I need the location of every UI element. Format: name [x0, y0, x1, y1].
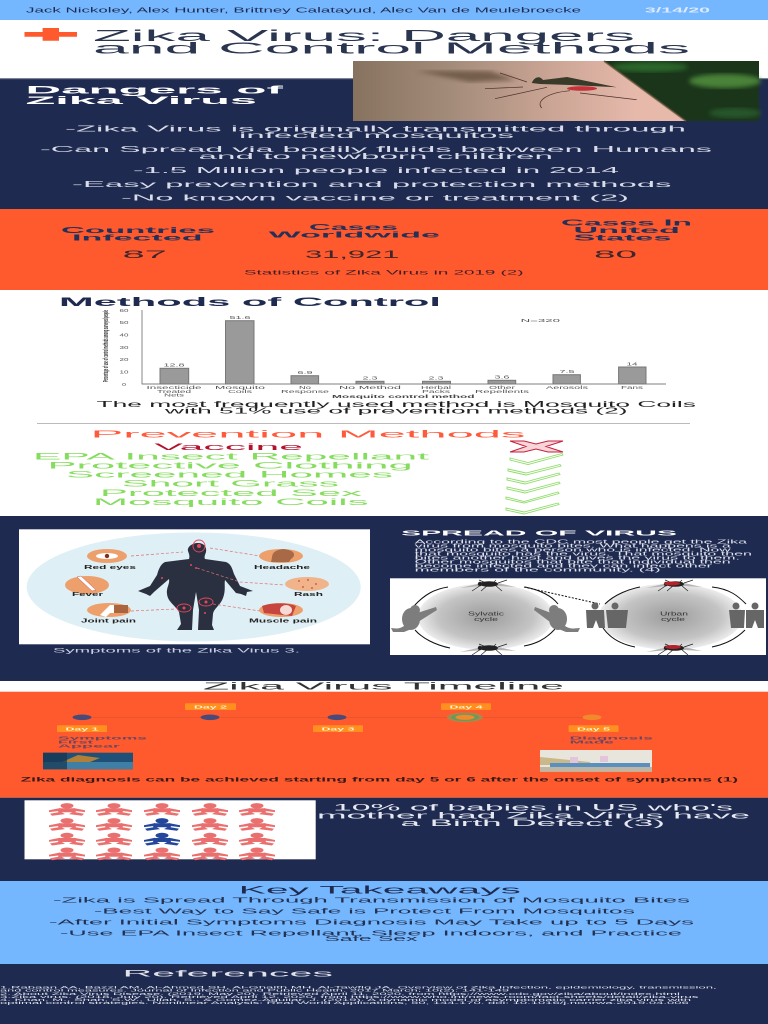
symptom: rash — [285, 577, 329, 598]
text: diagnosis made: Diagnosis — [570, 735, 654, 741]
symptom: muscle pain — [249, 603, 317, 625]
icon: medical cross — [24, 28, 77, 41]
text block: spread explanation: virus from mosquito bites. What happens is a — [415, 544, 731, 550]
bar chart: mosquito control methods: 2.3 — [362, 376, 379, 380]
heading: key takeaways: Key Takeaways — [239, 884, 523, 896]
text block: danger bullets: infected mosquitos — [239, 130, 514, 140]
figure: symptoms of Zika — [19, 529, 370, 644]
cycle labels: Sylvatic — [468, 611, 504, 617]
pictogram: babies — [24, 800, 316, 860]
stat: cases in United States: United — [574, 225, 680, 235]
bar chart: mosquito control methods — [103, 308, 666, 399]
text: symptoms first appear: First — [58, 740, 94, 746]
text block: citations: and control measures. Journal of Infection and Public Health. 2017 March; 10(2): 141-149 — [0, 988, 511, 993]
bar chart: mosquito control methods: 14 — [626, 362, 639, 366]
text block: takeaways: -Best Way to Say Safe is Protect From Mosquitos — [94, 908, 637, 916]
list: recommended methods: Screened Homes — [66, 470, 394, 480]
text block: danger bullets: -Can Spread via bodily fluids between Humans — [40, 144, 712, 154]
bar chart: mosquito control methods: 12.8 — [164, 362, 186, 368]
heading: spread of virus: SPREAD OF VIRUS — [401, 528, 677, 537]
top author bar: Jack Nickoley, Alex Hunter, Brittney Calatayud, Alec Van de Meulebroecke — [26, 8, 581, 14]
dashed connectors — [131, 548, 284, 611]
panel: dangers of Zika virus — [0, 78, 768, 210]
symptom: rash: Rash — [294, 592, 323, 598]
bar chart: mosquito control methods: 3.6 — [494, 374, 511, 380]
bar chart: mosquito control methods: 40 — [120, 332, 130, 338]
text block: takeaways: Safe Sex — [324, 936, 419, 943]
panel: key takeaways — [0, 881, 768, 964]
symptom: red eyes: Red eyes — [84, 565, 136, 571]
stat: cases worldwide: Worldwide — [269, 230, 441, 240]
day labels: Day 1 — [66, 726, 100, 732]
title: Zika Virus: Dangers — [93, 28, 636, 45]
text block: takeaways: -Use EPA Insect Repellant, Sleep Indoors, and Practice — [60, 931, 682, 938]
text: symptoms first appear — [58, 735, 148, 750]
cycle labels: cycle — [474, 617, 498, 623]
cycle labels: Urban — [660, 611, 688, 617]
item: vaccine: Vaccine — [154, 442, 303, 453]
text block: birth defect statistic: mother had Zika Virus have — [317, 810, 750, 820]
stat: cases worldwide: Cases — [309, 222, 399, 232]
bar chart: mosquito control methods: 0 — [122, 382, 127, 387]
bar chart: mosquito control methods: Packs — [422, 389, 452, 394]
bar chart: mosquito control methods: 10 — [120, 370, 130, 374]
text block: spread explanation: Other mosquitos that bite that individual then — [415, 560, 731, 566]
heading: dangers: Zika Virus — [26, 95, 257, 107]
symptom: red eyes — [84, 549, 136, 571]
bar chart: mosquito control methods: 6.9 — [298, 370, 314, 375]
mosquitoes — [460, 580, 516, 591]
text block: birth defect statistic — [317, 803, 750, 828]
symptom: joint pain — [81, 603, 136, 625]
text block: spread explanation: become infected and they can infect other — [415, 564, 713, 570]
bar chart: mosquito control methods: Fans — [621, 385, 645, 390]
text block: spread explanation: members of the community. (4) — [415, 568, 662, 574]
list: recommended methods: EPA Insect Repellant — [33, 451, 431, 462]
stat: countries infected: Infected — [72, 232, 202, 242]
image: mosquito on blue — [43, 753, 133, 769]
text block: danger bullets: -No known vaccine or treatment (2) — [121, 192, 630, 202]
panel: birth defects — [0, 798, 768, 881]
list: recommended methods: Protective Clothing — [48, 461, 413, 472]
bar chart: mosquito control methods: Other — [489, 385, 516, 390]
text block: chart conclusion: with 51% use of prevention methods (2) — [162, 406, 629, 416]
text: diagnosis made — [570, 735, 654, 746]
text block: citations: 4. Khan, M., Shah, S.W., Ullah, S., & Gomez-Aguilar, J. (2019). A dynamic model of asymptomatic carrier zika virus with — [0, 997, 691, 1002]
text block: danger bullets: -Zika Virus is originally transmitted through — [65, 124, 687, 134]
cycle labels — [468, 611, 688, 623]
day labels: Day 5 — [577, 726, 611, 732]
top author bar: 3/14/20 — [645, 8, 710, 14]
text block: diagnosis note: Zika diagnosis can be achieved starting from day 5 or 6 after the onset of symptoms (1) — [21, 778, 738, 784]
bar chart: mosquito control methods: No — [299, 385, 312, 390]
bar chart: mosquito control methods: Aerosols — [546, 385, 590, 390]
list: recommended methods: Short Grass — [122, 479, 340, 490]
bar chart: mosquito control methods: No Method — [339, 385, 403, 390]
bar chart: mosquito control methods: Coils — [228, 389, 254, 394]
title header — [0, 20, 768, 79]
bar chart: mosquito control methods: Treated — [157, 389, 192, 394]
bar chart: mosquito control methods: Insecticide — [146, 385, 203, 390]
text block: danger bullets: -Easy prevention and protection methods — [72, 179, 672, 189]
text block: citations: 3.Zika virus. (2018, July 20). Retrieved April 12, 2020, from https://www.who.int/news-room/fact-sheets/detail/zika-virus — [0, 994, 698, 999]
bar chart: mosquito control methods: Mosquito control method — [332, 394, 475, 399]
photo: mosquito on skin — [353, 61, 761, 121]
heading: references: References — [122, 969, 334, 980]
bar chart: mosquito control methods: 50 — [120, 320, 130, 325]
text: symptoms first appear: Appear — [58, 744, 120, 750]
icons: green check marks — [506, 454, 563, 514]
heading: dangers — [26, 84, 284, 107]
text block: citations — [0, 984, 717, 1005]
day labels — [57, 703, 619, 732]
day labels: Day 2 — [194, 704, 228, 710]
stat: cases in United States: Cases In — [561, 218, 692, 228]
stat: cases worldwide — [269, 222, 441, 261]
caption: statistics: Statistics of Zika Virus in 2019 (2) — [244, 270, 524, 276]
diagram: sylvatic and urban cycles — [390, 578, 766, 655]
heading: dangers: Dangers of — [26, 84, 284, 96]
list: recommended methods: Mosquito Coils — [93, 497, 370, 508]
text block: citations: 1.Rabaan AA, Bazzi AM, Al-Ahmed SH, Al-Ghaith MH, Al-Tawfiq JA. Overview of Zika infection, epidemiology, transmission, — [0, 984, 717, 990]
day labels: Day 4 — [450, 704, 484, 710]
text block: danger bullets: -1.5 Million people infected in 2014 — [133, 165, 620, 175]
stat: countries infected — [61, 225, 216, 261]
text block: birth defect statistic: a Birth Defect (3) — [400, 818, 665, 828]
text block: spread explanation: According to the CDC most people get the Zika — [415, 540, 748, 546]
text block: citations: optimal control strategies. Nonlinear Analysis: Real World Applications, 50, 144-170. doi: 10.1016/j.nonrwa.2019.04.006 — [0, 1000, 691, 1005]
day labels: Day 3 — [322, 726, 356, 732]
text block: chart conclusion: The most frequently used method is Mosquito Coils — [96, 400, 696, 409]
bar chart: mosquito control methods: Mosquito — [215, 385, 267, 390]
body silhouette — [138, 543, 253, 630]
bar chart: mosquito control methods: Herbal — [421, 385, 451, 390]
title — [93, 28, 691, 58]
icon: red cross mark — [510, 441, 563, 452]
heading: timeline: Zika Virus Timeline — [203, 682, 566, 692]
bar chart: mosquito control methods: 20 — [120, 357, 130, 362]
panel: timeline — [0, 692, 768, 798]
stat: cases in United States — [561, 218, 692, 261]
symptom: fever: Fever — [72, 592, 103, 598]
title: and Control Methods — [93, 40, 691, 58]
text block: spread explanation: that mosquito has the virus. That mosquito then — [415, 552, 753, 558]
image: hospital ward — [540, 750, 652, 772]
text block: danger bullets: and to newborn children — [198, 151, 554, 161]
text block: danger bullets — [40, 124, 712, 202]
stat: cases worldwide: 31,921 — [305, 249, 400, 261]
text block: spread explanation — [415, 540, 753, 574]
caption: symptoms: Symptoms of the Zika Virus 3. — [53, 648, 301, 655]
text: symptoms first appear: Symptoms — [58, 735, 148, 741]
list: recommended methods: Protected Sex — [100, 488, 363, 499]
text block: takeaways: -Zika is Spread Through Transmission of Mosquito Bites — [53, 898, 692, 904]
symptom: joint pain: Joint pain — [81, 619, 136, 625]
panel: statistics — [0, 209, 768, 290]
symptom: fever — [65, 576, 109, 598]
timeline dots — [72, 712, 602, 722]
bar chart: mosquito control methods: 51.6 — [230, 315, 252, 320]
heading: prevention methods: Prevention Methods — [91, 429, 525, 440]
panel: references — [0, 964, 768, 1024]
text: Percentage of use of control methods among surveyed people — [103, 310, 110, 382]
symptom: headache — [254, 549, 311, 571]
bar chart: mosquito control methods: 7.5 — [560, 369, 576, 374]
bar chart: mosquito control methods: 2.3 — [428, 376, 445, 380]
text block: citations: 2. About Zika Virus Disease. (2019, May 20). Retrieved April 11, 2020, from https://www.cdc.gov/zika/about/index.html — [0, 991, 680, 996]
bar chart: mosquito control methods: 60 — [120, 308, 130, 313]
text block: spread explanation: mosquito bites a person who is infected. Now — [415, 548, 732, 554]
text block: chart conclusion — [96, 400, 696, 416]
text block: takeaways: -After Initial Symptoms Diagnosis May Take up to 5 Days — [49, 920, 696, 927]
people — [586, 602, 764, 628]
heading: methods of control: Methods of Control — [59, 297, 441, 309]
stat: cases in United States: 80 — [594, 249, 637, 261]
bar chart: mosquito control methods: Nets — [164, 392, 186, 398]
text block: spread explanation: bites another host and gives the virus to them. — [415, 556, 740, 562]
symptom markers on body — [177, 540, 213, 612]
stat: cases in United States: States — [574, 233, 673, 243]
bar chart: mosquito control methods: N=320 — [521, 318, 562, 323]
cycle labels: cycle — [661, 617, 685, 623]
cycle arrows — [414, 587, 746, 648]
heading: timeline — [0, 681, 768, 692]
panel: symptoms and spread — [0, 516, 768, 681]
bar chart: mosquito control methods: Response — [281, 389, 330, 394]
bar chart: mosquito control methods: Repellents — [475, 389, 531, 394]
stat: countries infected: Countries — [61, 225, 216, 235]
top author bar — [0, 0, 768, 20]
text: diagnosis made: Made — [570, 740, 615, 746]
text block: takeaways — [49, 898, 696, 943]
monkeys — [391, 605, 580, 632]
panel: prevention methods — [33, 429, 563, 514]
symptom: muscle pain: Muscle pain — [249, 619, 317, 625]
stat: countries infected: 87 — [122, 249, 167, 261]
symptom: headache: Headache — [254, 565, 311, 571]
bar chart: mosquito control methods: 30 — [120, 345, 130, 350]
list: recommended methods — [33, 451, 431, 508]
text block: birth defect statistic: 10% of babies in US who's — [333, 803, 735, 813]
